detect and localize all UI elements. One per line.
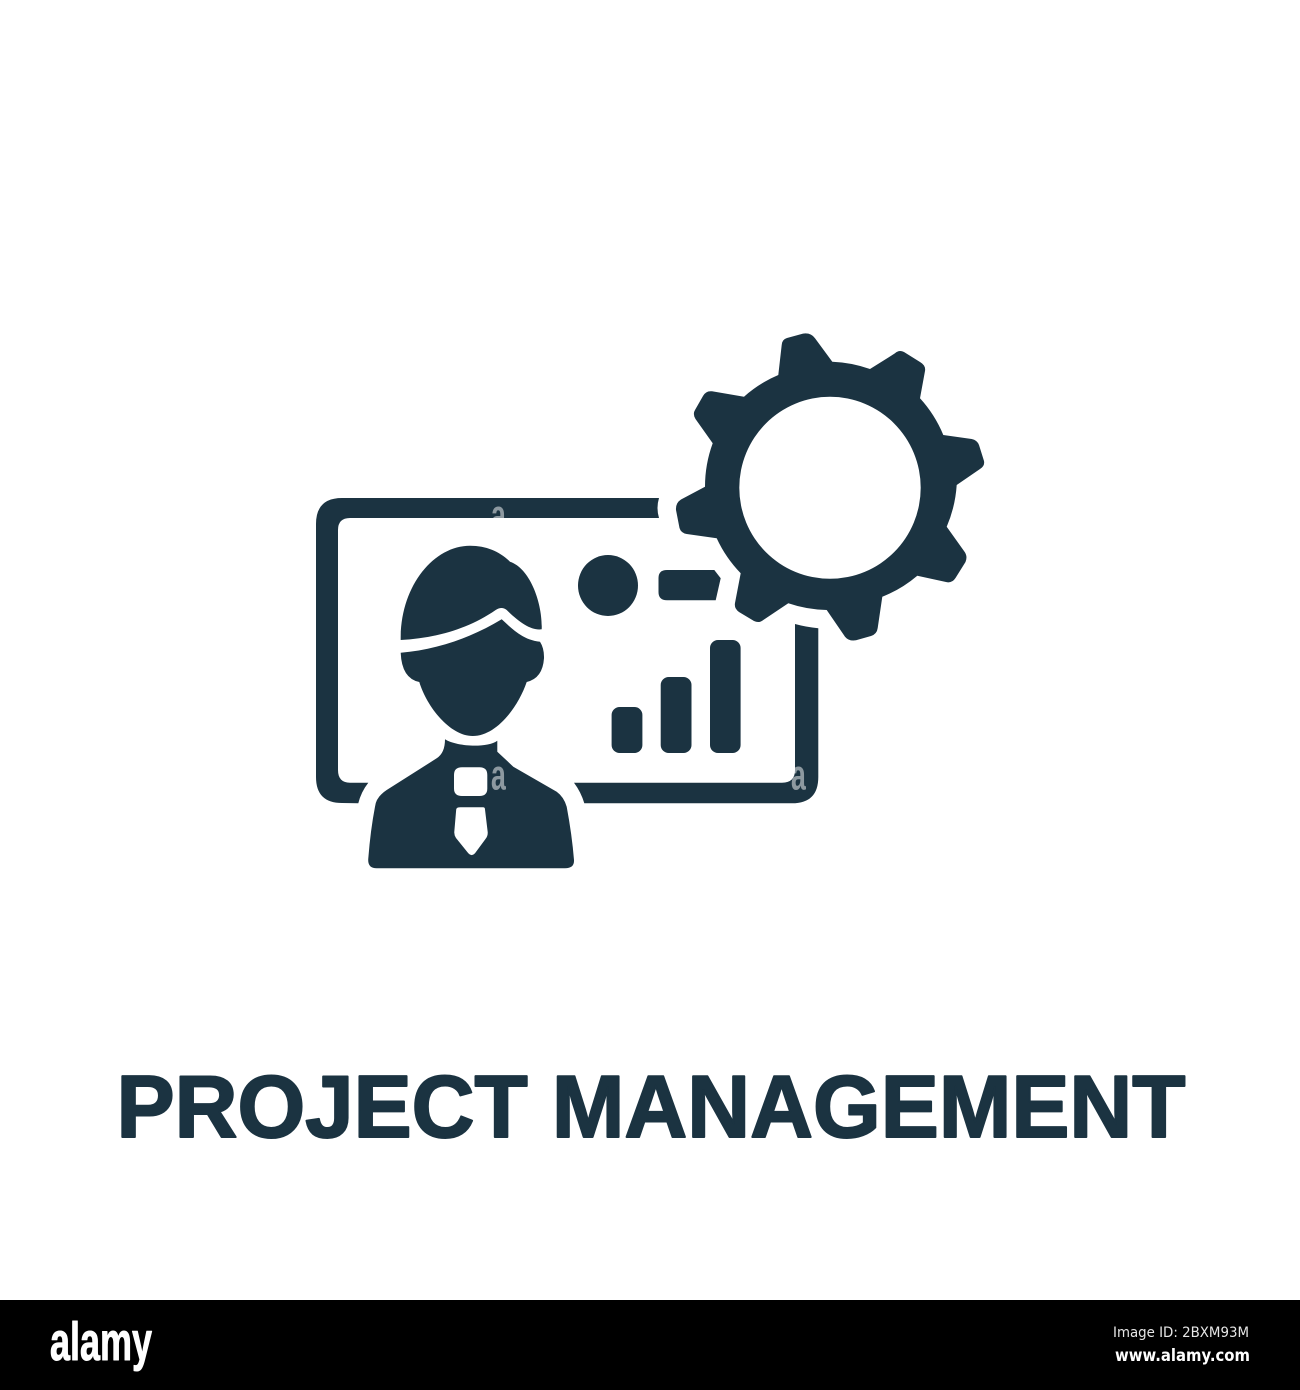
footer image id: Image ID: 2BXM93M (1113, 1325, 1249, 1341)
icon: project management presenter with board and gear (316, 333, 984, 868)
icon: board circle (578, 555, 638, 616)
title: PROJECT MANAGEMENT (116, 1057, 1186, 1156)
footer website: www.alamy.com (1115, 1346, 1250, 1366)
watermark: alamy letter marks: a (791, 751, 807, 799)
bar chart (612, 640, 741, 753)
person hair (401, 546, 542, 640)
person torso with collar knot and tie cut-outs (368, 739, 574, 868)
icon: person (368, 546, 574, 868)
watermark: alamy letter marks: a (491, 751, 507, 799)
watermark: alamy letter marks (491, 491, 807, 799)
icon: board label pill (658, 570, 721, 600)
watermark: alamy letter marks: a (491, 491, 507, 539)
footer bar (0, 1300, 1300, 1390)
icon: gear (676, 333, 984, 641)
person face (401, 619, 544, 736)
footer logo: alamy (50, 1312, 152, 1372)
icon: presentation board frame (316, 498, 818, 803)
